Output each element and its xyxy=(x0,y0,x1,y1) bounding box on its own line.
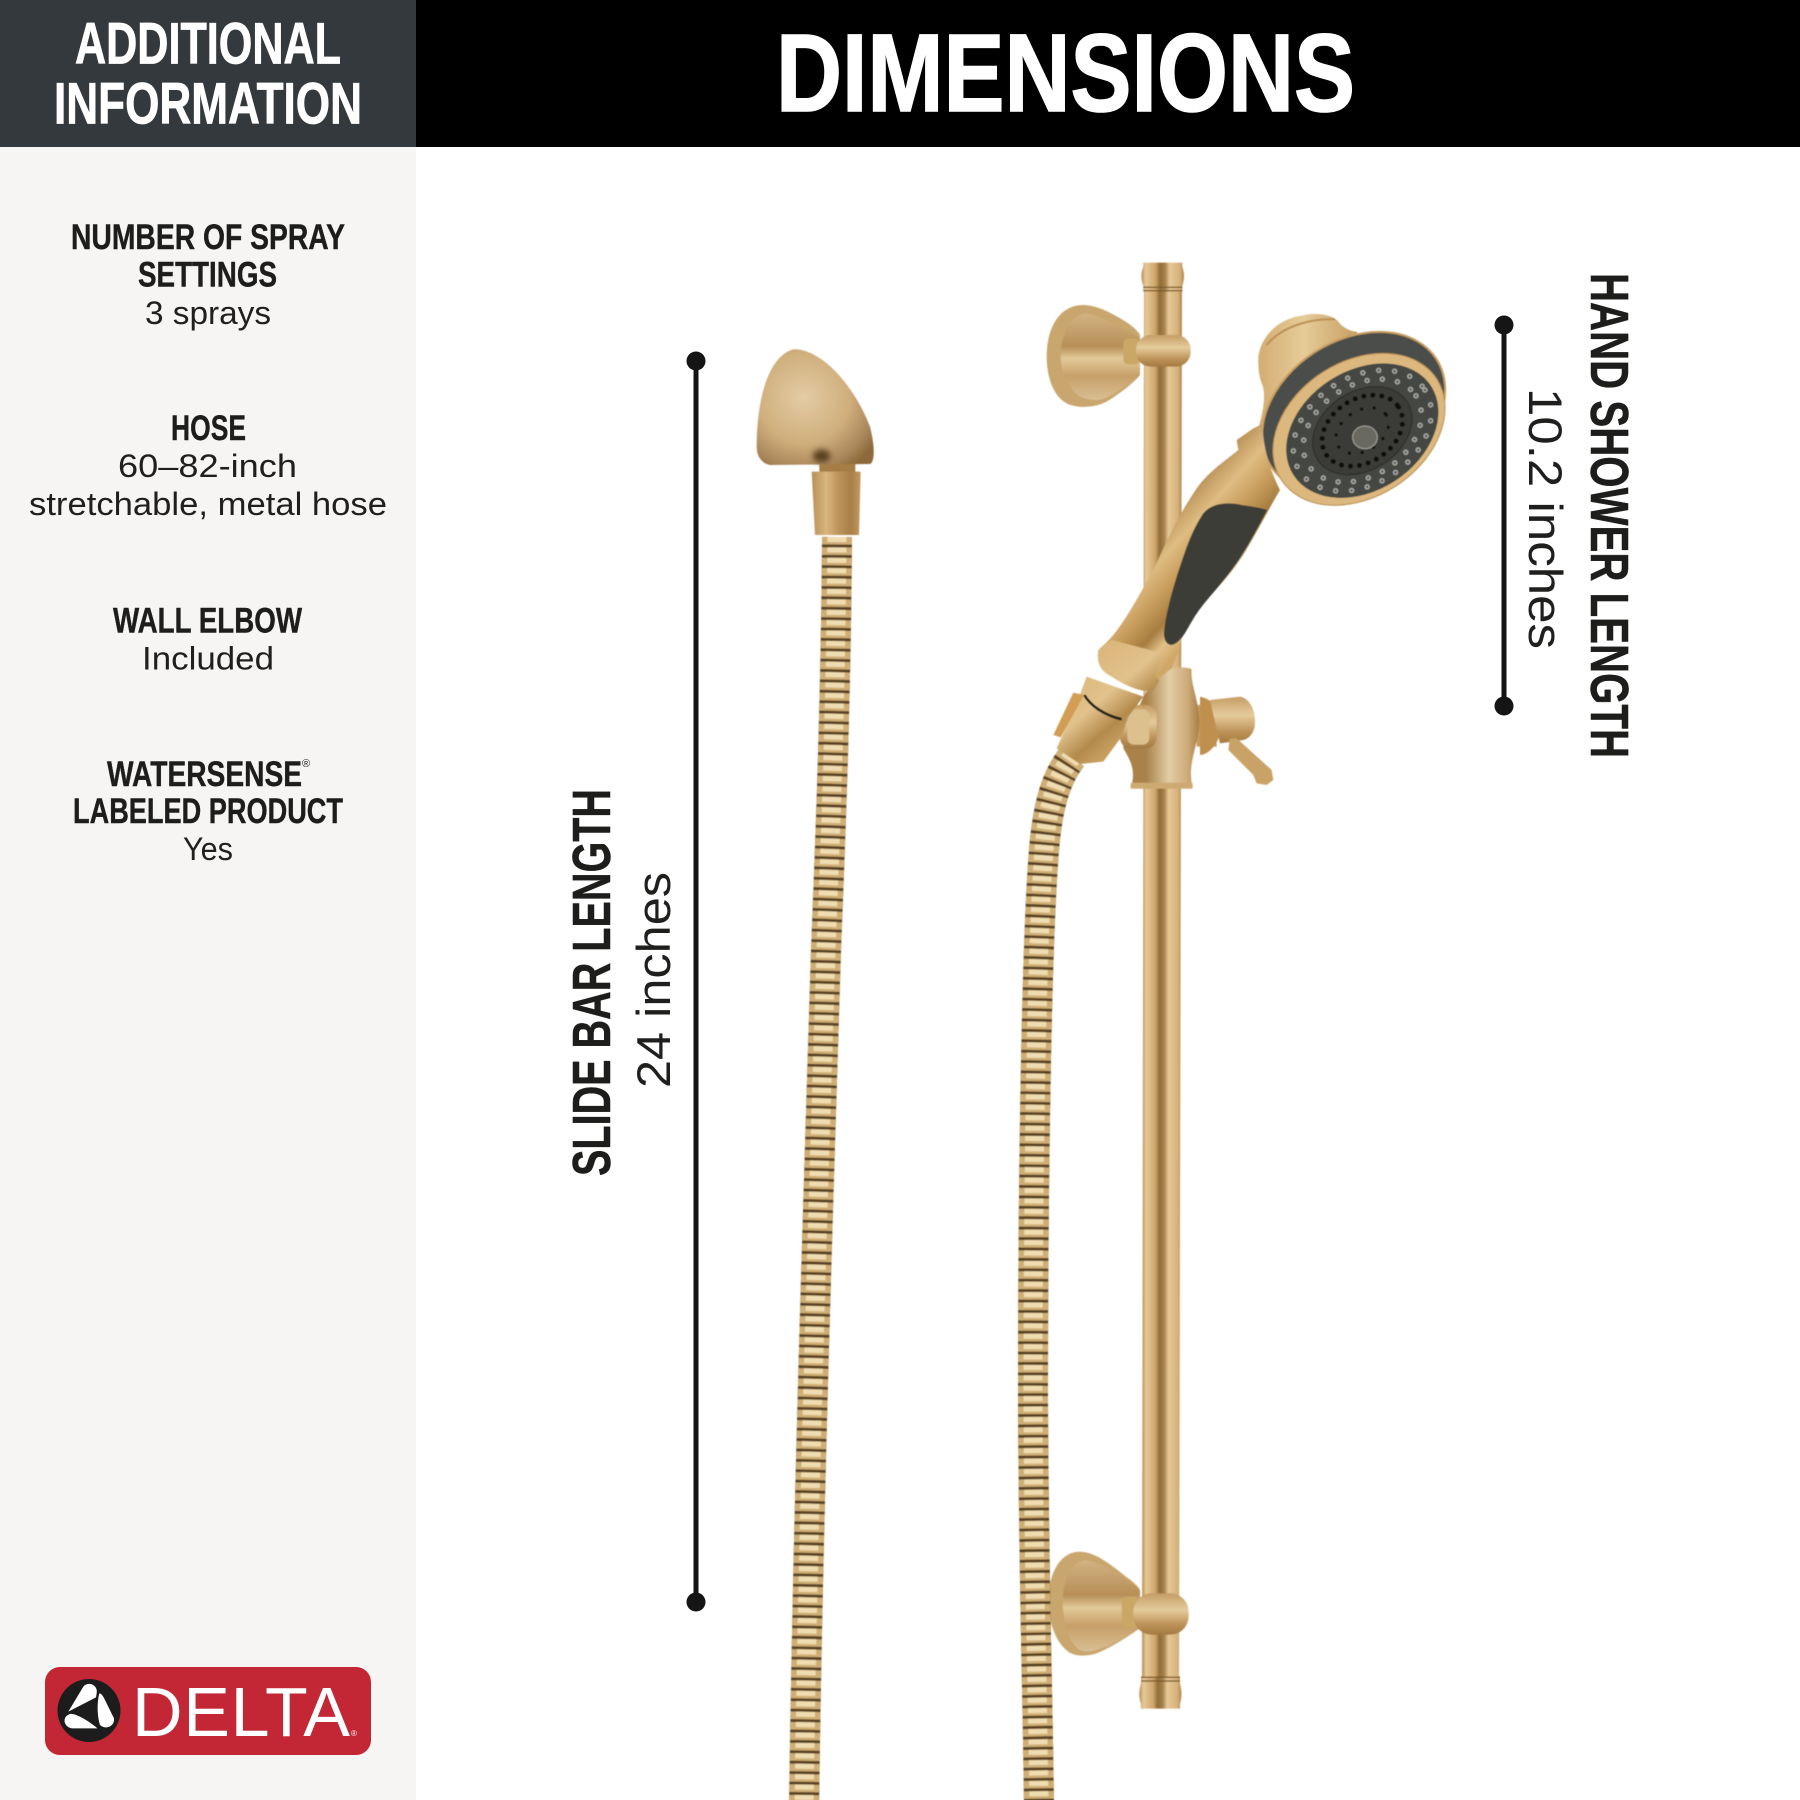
slide bar xyxy=(1139,263,1184,1709)
spec: number of spray settings: SETTINGS xyxy=(138,256,277,294)
hand shower assembly xyxy=(1047,299,1476,680)
spec: number of spray settings: 3 sprays xyxy=(145,295,271,331)
spec: wall elbow: Included xyxy=(142,640,274,676)
hose: loose metal hose xyxy=(804,537,837,1800)
icon: delta triangle mark xyxy=(58,1679,120,1742)
dimension: slide bar length xyxy=(562,352,706,1612)
panel: dimensions header bar xyxy=(415,0,1800,147)
spec: watersense labeled product: WATERSENSE xyxy=(107,755,302,794)
top end cap xyxy=(1141,263,1184,292)
shower head xyxy=(1232,299,1476,537)
spec: number of spray settings: NUMBER OF SPRAY xyxy=(71,218,345,257)
dimension: hand shower length xyxy=(1494,273,1639,758)
spec: hose: HOSE xyxy=(171,409,246,448)
wall elbow xyxy=(757,349,874,535)
spec: hose: 60–82-inch xyxy=(118,448,297,484)
title: dimensions: DIMENSIONS xyxy=(776,12,1355,135)
header: additional information xyxy=(0,0,416,147)
handle grip xyxy=(1164,503,1267,645)
logo: delta: ® xyxy=(351,1729,357,1738)
hose cradle xyxy=(1053,640,1163,764)
spec: wall elbow xyxy=(113,602,302,676)
panel: additional information sidebar xyxy=(0,0,416,1800)
illustration: slide bar with hand shower xyxy=(1033,263,1476,1800)
spec: hose: stretchable, metal hose xyxy=(29,486,387,522)
header: additional information: ADDITIONAL xyxy=(75,12,341,76)
spec: watersense labeled product: LABELED PRODUCT xyxy=(73,792,343,831)
lever knob xyxy=(1197,697,1273,785)
lower wall bracket xyxy=(1048,1552,1189,1656)
flexible hose to hand shower xyxy=(1033,757,1072,1800)
slider body with knobs xyxy=(1120,667,1273,789)
spec: number of spray settings xyxy=(71,218,345,331)
spec: hose xyxy=(29,409,387,522)
upper wall bracket xyxy=(1047,305,1191,407)
dimension: hand shower length: HAND SHOWER LENGTH xyxy=(1579,273,1639,758)
illustration: wall elbow and hose xyxy=(757,349,874,1800)
hand shower handle xyxy=(1100,424,1280,680)
spec: watersense labeled product xyxy=(73,755,343,867)
logo: delta: DELTA xyxy=(132,1673,350,1751)
dimension: slide bar length: SLIDE BAR LENGTH xyxy=(562,789,622,1176)
dimension: slide bar length: 24 inches xyxy=(627,872,680,1088)
bottom end cap xyxy=(1139,1677,1181,1709)
dimension: hand shower length: 10.2 inches xyxy=(1519,388,1572,649)
spec: watersense labeled product: ® xyxy=(302,758,310,770)
header: additional information: INFORMATION xyxy=(54,72,362,136)
logo: delta xyxy=(45,1667,371,1755)
spec: wall elbow: WALL ELBOW xyxy=(113,602,302,640)
spec: watersense labeled product: Yes xyxy=(183,831,233,867)
